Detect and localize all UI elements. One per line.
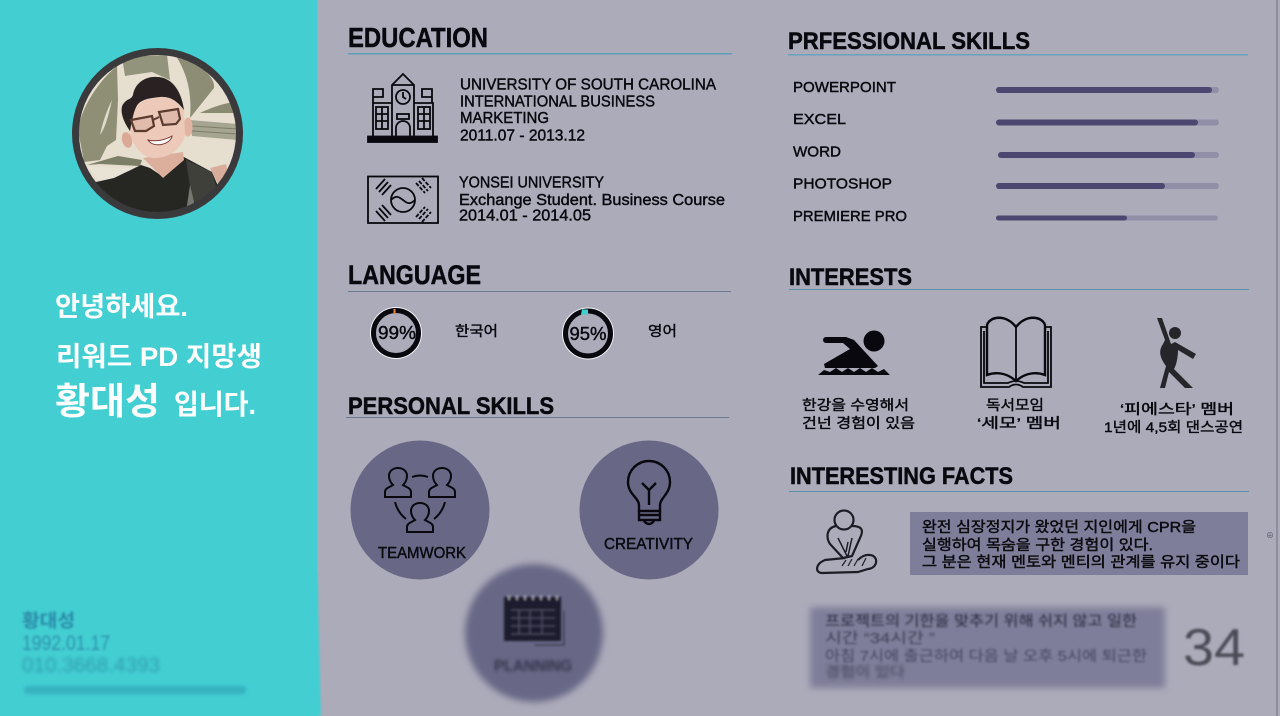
text: university of south carolina: UNIVERSITY OF SOUTH CAROLINA [460, 76, 717, 94]
fact box: cpr: 완전 심장정지가 왔었던 지인에게 CPR을 [922, 519, 1196, 536]
text: swimming: 건넌 경험이 있음 [802, 415, 915, 431]
greeting text [55, 292, 262, 422]
skill: powerpoint [793, 79, 1219, 96]
label: teamwork: TEAMWORK [378, 545, 467, 562]
contact details, blurred: 황대성 [22, 611, 75, 631]
panel: interests: INTERESTS [789, 264, 912, 291]
text: swimming: 한강을 수영해서 [802, 397, 909, 413]
panel: professional skills: PRFESSIONAL SKILLS [788, 28, 1030, 55]
greeting text: 입니다. [174, 389, 256, 420]
fact box: 34 hours: 시간 “34시간 ” [825, 630, 935, 647]
contact details, blurred [22, 611, 246, 694]
fact box: 34 hours: 프로젝트의 기한을 맞추기 위해 쉬지 않고 일한 [825, 613, 1137, 630]
fact box: 34 hours: 아침 7시에 출근하여 다음 날 오후 5시에 퇴근한 [825, 648, 1147, 665]
text: reading club: 독서모임 [986, 397, 1044, 413]
panel: profile sidebar [0, 0, 321, 716]
greeting text: 안녕하세요. [55, 292, 188, 322]
fact box: cpr [910, 512, 1248, 575]
profile photo [72, 48, 243, 220]
fact box: 34 hours: 경험이 있다 [825, 664, 905, 681]
text: dance club: 1년에 4,5회 댄스공연 [1104, 419, 1243, 435]
greeting text: 황대성 [55, 381, 160, 422]
panel: education: EDUCATION [348, 22, 488, 53]
planning badge, blurred [465, 564, 603, 702]
skill: premiere pro [793, 208, 1218, 225]
text: yonsei university: Exchange Student. Business Course [459, 192, 725, 209]
creativity badge [580, 440, 718, 580]
icon: dancer [1157, 318, 1196, 388]
icon: open book [981, 318, 1051, 387]
label: creativity: CREATIVITY [604, 536, 693, 553]
skill: excel: EXCEL [793, 111, 846, 128]
greeting text: 리워드 PD 지망생 [56, 342, 262, 372]
icon: korean flag [368, 176, 438, 223]
chart: english 95 percent ring [562, 308, 614, 360]
panel: interesting facts [789, 463, 1274, 688]
soft sidebar edge [310, 570, 321, 716]
right edge shadow [1276, 0, 1278, 716]
chart: korean 99 percent ring: 99% [378, 323, 416, 343]
panel: interests [789, 264, 1249, 435]
skill: powerpoint: POWERPOINT [793, 79, 896, 96]
text: reading club [977, 397, 1061, 431]
teamwork badge [350, 440, 490, 580]
text: yonsei university [459, 174, 725, 224]
fact box: cpr: 실행하여 목숨을 구한 경험이 있다. [922, 537, 1153, 554]
text: university of south carolina: INTERNATIONAL BUSINESS [460, 94, 655, 110]
panel: interesting facts: INTERESTING FACTS [790, 463, 1013, 490]
panel: personal skills: PERSONAL SKILLS [348, 393, 554, 420]
panel: education [348, 22, 732, 224]
icon: light bulb [628, 461, 670, 524]
text: reading club: ‘세모’ 멤버 [977, 415, 1061, 431]
panel: personal skills [346, 393, 729, 702]
text: dance club: ‘피에스타’ 멤버 [1120, 401, 1234, 417]
skill: photoshop: PHOTOSHOP [793, 176, 892, 192]
icon: university building [368, 74, 437, 142]
contact details, blurred: 010.3668.4393 [22, 654, 160, 677]
text: university of south carolina: MARKETING [460, 110, 549, 127]
text: yonsei university: 2014.01 - 2014.05 [459, 208, 591, 224]
panel: language [348, 260, 731, 360]
icon: cpr [817, 510, 876, 573]
panel: professional skills [788, 28, 1248, 225]
chart: korean 99 percent ring [370, 307, 422, 359]
chart: english 95 percent ring: 95% [570, 324, 606, 344]
label: planning: PLANNING [494, 658, 572, 675]
skill: premiere pro: PREMIERE PRO [793, 208, 907, 225]
text: university of south carolina: 2011.07 - 2013.12 [460, 128, 585, 144]
label: english: 영어 [648, 323, 677, 339]
contact details, blurred: 1992.01.17 [22, 632, 110, 655]
skill: excel [793, 111, 1219, 128]
icon: team people [385, 468, 455, 532]
text: yonsei university: YONSEI UNIVERSITY [459, 174, 604, 192]
panel: language: LANGUAGE [348, 260, 481, 290]
icon: calendar [504, 595, 564, 645]
big number 34: 34 [1183, 619, 1245, 677]
text: dance club [1104, 401, 1243, 435]
small margin mark: ⊕ [1266, 531, 1274, 540]
fact box: cpr: 그 분은 현재 멘토와 멘티의 관계를 유지 중이다 [922, 554, 1240, 571]
label: korean: 한국어 [455, 323, 498, 339]
text: swimming [802, 397, 915, 431]
icon: swimmer [818, 330, 890, 375]
skill: photoshop [793, 176, 1219, 192]
fact box: 34 hours [810, 607, 1165, 688]
illegible email line [24, 686, 246, 694]
skill: word [793, 144, 1219, 160]
text: university of south carolina [460, 76, 717, 144]
skill: word: WORD [793, 144, 841, 160]
